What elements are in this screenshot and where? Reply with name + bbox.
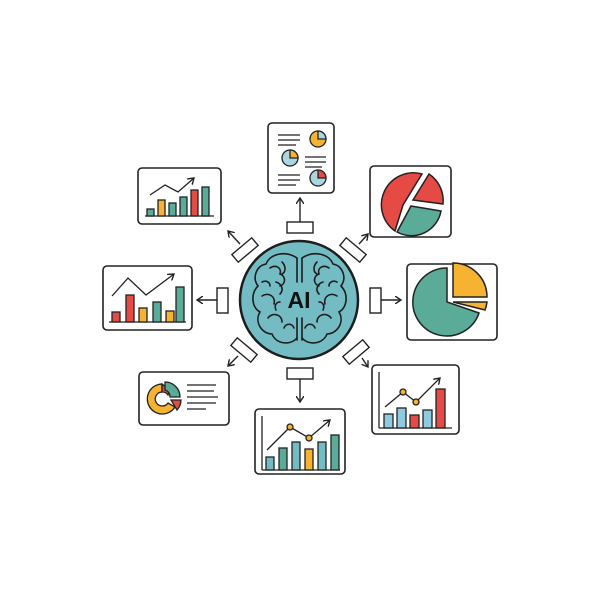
connector: bottom	[287, 368, 313, 402]
card: bottom chart	[255, 409, 345, 474]
connector: upper-right	[340, 234, 368, 262]
connector: upper-left	[228, 231, 258, 262]
card: bottom-right chart	[372, 365, 459, 434]
card: top-left chart	[138, 168, 221, 224]
card: right pie	[407, 263, 497, 340]
connector: top	[287, 198, 313, 233]
connector: left	[197, 288, 228, 313]
connector: lower-left	[228, 338, 257, 366]
card: top document with pies	[268, 123, 334, 193]
connector: right	[370, 288, 401, 313]
connector: lower-right	[343, 340, 369, 367]
card: bottom-left donut	[139, 372, 229, 425]
text: AI: AI	[288, 287, 310, 313]
brain hub	[240, 241, 358, 359]
card: top-right pie	[370, 166, 451, 237]
card: left chart	[103, 266, 192, 330]
